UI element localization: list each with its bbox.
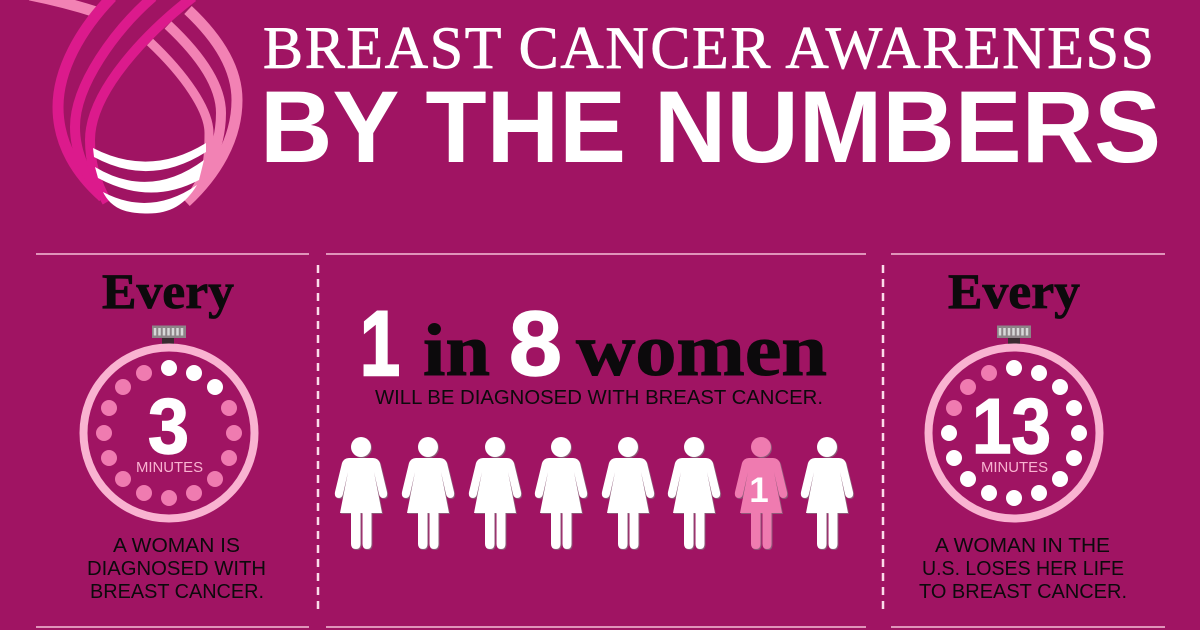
text: diagnosed caption: BREAST CANCER. [90, 581, 264, 603]
heading: 1 in 8 women: in [423, 310, 490, 392]
icon: stopwatch 3: 3 [148, 382, 189, 470]
text: loses her life caption: A WOMAN IN THE [935, 535, 1110, 557]
heading: every: Every [948, 263, 1080, 319]
icon: stopwatch 3: MINUTES [136, 460, 203, 476]
divider rules [36, 254, 1165, 627]
icon: ribbon logo [30, 0, 237, 214]
title [260, 15, 1161, 184]
icon: stopwatch 13 [928, 326, 1100, 518]
heading: 1 in 8 women: 1 [360, 293, 400, 395]
panel: every 13 minutes [919, 263, 1127, 603]
panel: 1 in 8 women [335, 293, 854, 550]
chart: row of eight women [335, 437, 854, 550]
title: BREAST CANCER AWARENESS [263, 15, 1154, 81]
icon: stopwatch 13: MINUTES [981, 460, 1048, 476]
icon: stopwatch 3 [84, 326, 254, 518]
text: subheading: WILL BE DIAGNOSED WITH BREAST CANCER. [375, 387, 823, 409]
text: loses her life caption: U.S. LOSES HER LIFE [922, 558, 1124, 580]
text: diagnosed caption [87, 535, 266, 603]
panel: every 3 minutes [84, 263, 266, 603]
heading: 1 in 8 women: 8 [509, 293, 562, 395]
text: loses her life caption [919, 535, 1127, 603]
chart: row of eight women: 1 [749, 471, 769, 510]
text: loses her life caption: TO BREAST CANCER. [919, 581, 1127, 603]
text: diagnosed caption: DIAGNOSED WITH [87, 558, 266, 580]
white ribbon stripes [93, 143, 206, 214]
icon: stopwatch 13: 13 [972, 382, 1051, 470]
title: BY THE NUMBERS [260, 70, 1161, 184]
text: diagnosed caption: A WOMAN IS [113, 535, 240, 557]
heading: every: Every [102, 263, 234, 319]
heading: 1 in 8 women: women [576, 310, 827, 392]
heading: 1 in 8 women [360, 293, 827, 395]
